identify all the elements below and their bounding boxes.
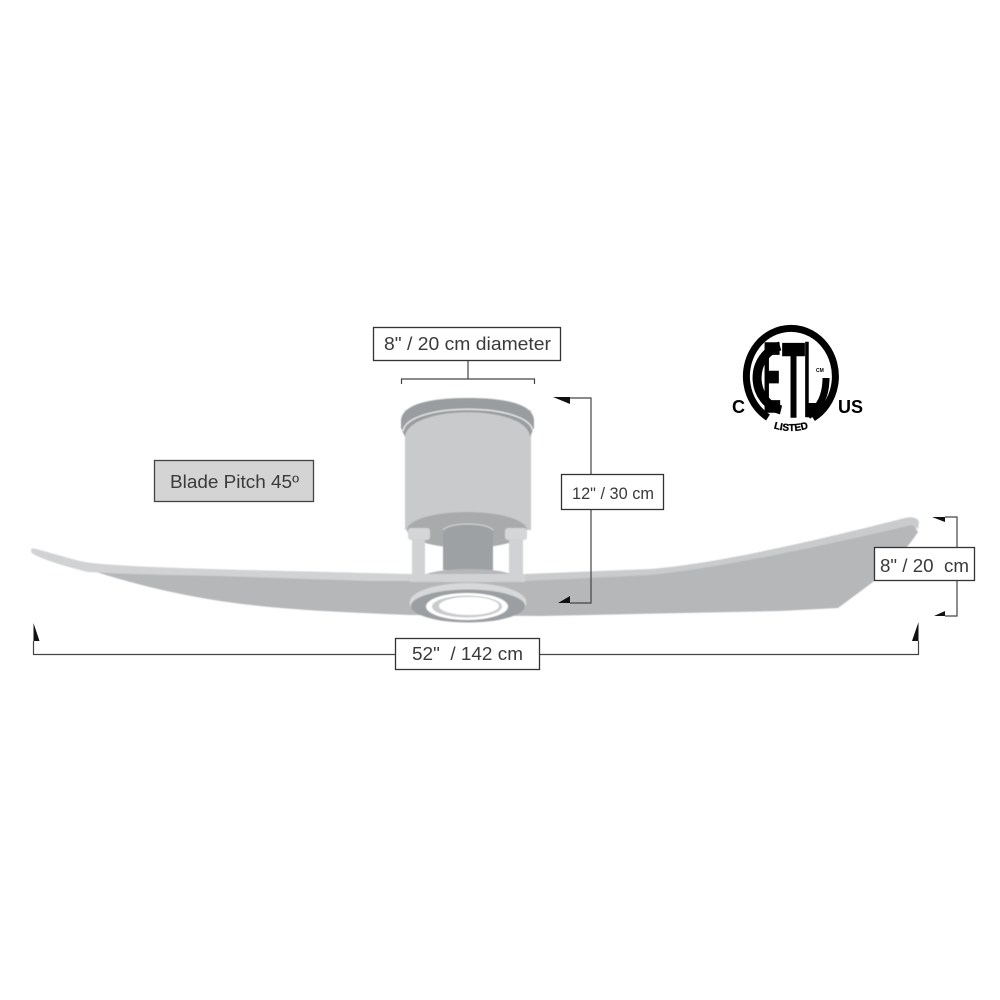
dimension: canopy diameter xyxy=(374,328,560,384)
dimension: total span xyxy=(34,622,918,670)
ETL listed certification logo: US xyxy=(838,397,863,417)
label: blade pitch: Blade Pitch 45º xyxy=(170,472,299,492)
ETL listed certification logo: LISTED xyxy=(774,422,808,432)
ETL listed certification logo xyxy=(732,320,863,440)
label box: height xyxy=(562,474,664,510)
ETL listed certification logo: C xyxy=(732,397,745,417)
center shaft and support rods xyxy=(410,524,525,582)
dimension: height xyxy=(553,397,664,603)
ceiling fan illustration xyxy=(31,398,919,622)
ETL listed certification logo: CM xyxy=(816,368,824,374)
label box: height: 12" / 30 cm xyxy=(572,484,654,503)
ETL listed certification logo: T xyxy=(782,320,805,440)
label box: total span xyxy=(396,638,540,670)
ETL listed certification logo: L xyxy=(804,321,817,439)
light fixture xyxy=(410,583,526,622)
dimension: blade width xyxy=(874,517,974,616)
label box: canopy diameter: 8" / 20 cm diameter xyxy=(384,334,551,354)
motor canopy xyxy=(401,398,534,548)
label: blade pitch xyxy=(154,460,314,502)
fan blades xyxy=(31,517,919,616)
ETL listed certification logo: E xyxy=(763,322,781,434)
label box: blade width: 8" / 20 cm xyxy=(880,556,969,576)
label box: canopy diameter xyxy=(374,328,560,360)
label box: total span: 52" / 142 cm xyxy=(412,644,523,664)
